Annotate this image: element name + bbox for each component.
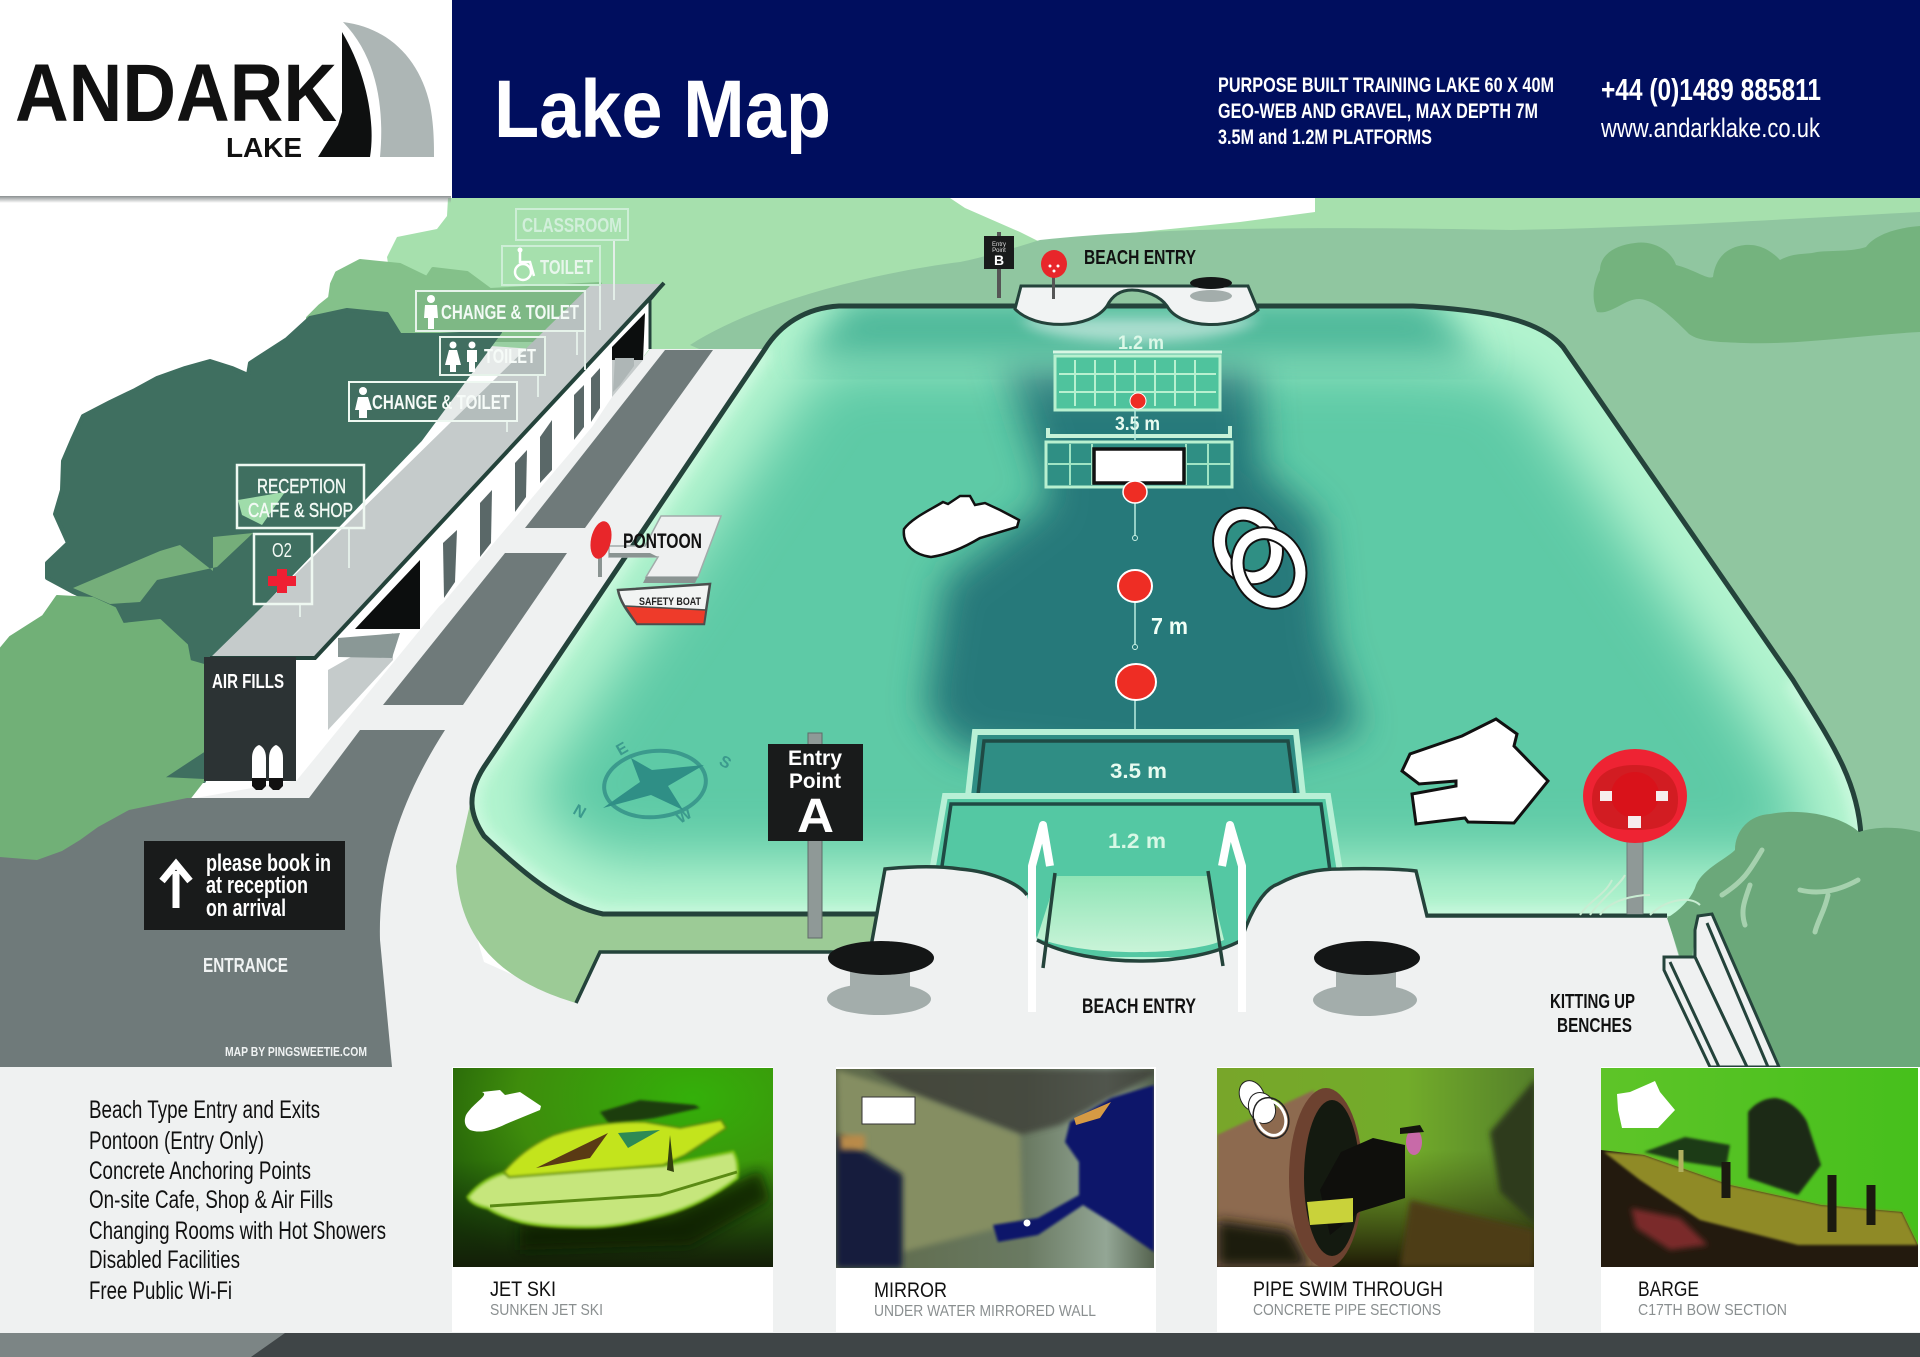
buoy 4	[1116, 664, 1156, 700]
tree bottom right	[1580, 812, 1920, 1067]
entry point B sign: B	[994, 252, 1004, 268]
lake facts	[1218, 74, 1554, 149]
green hill behind the lake	[690, 212, 1920, 1067]
buoy 1	[1130, 393, 1146, 409]
lake outline	[472, 306, 1861, 914]
logo sub word: LAKE	[226, 132, 302, 163]
far beach entry deck	[984, 232, 1258, 325]
sign: women's change and toilet: CHANGE & TOILET	[372, 392, 510, 414]
small light foliage	[73, 533, 253, 604]
near door	[355, 560, 420, 629]
facilities list: On-site Cafe, Shop & Air Fills	[89, 1186, 333, 1214]
lake facts: PURPOSE BUILT TRAINING LAKE 60 X 40M	[1218, 74, 1554, 97]
credit: MAP BY PINGSWEETIE.COM	[225, 1044, 367, 1059]
entry point B sign: Point	[992, 248, 1006, 254]
caption: MIRROR	[874, 1279, 947, 1302]
entrance label: ENTRANCE	[203, 955, 288, 977]
entry point A sign	[768, 733, 863, 938]
photo marker	[1238, 1080, 1264, 1110]
benches label	[1550, 991, 1635, 1037]
depth label: 1.2 m	[1118, 333, 1164, 354]
logo wordmark: ANDARK	[15, 48, 337, 139]
bottom strip	[0, 1067, 1920, 1333]
safety boat: SAFETY BOAT	[639, 596, 701, 608]
wreck hull	[1601, 1150, 1918, 1267]
near platform 3.5 m	[968, 732, 1303, 796]
lower road strip	[383, 553, 567, 705]
caption: CONCRETE PIPE SECTIONS	[1253, 1302, 1441, 1319]
reed plants	[1580, 875, 1700, 915]
caption: SUNKEN JET SKI	[490, 1302, 603, 1319]
arrow up	[162, 864, 190, 908]
jet ski wreck marker	[904, 496, 1019, 557]
red hull patch	[1631, 1208, 1708, 1250]
logo panel	[0, 0, 451, 203]
pipe swim through marker	[1209, 504, 1312, 614]
diver	[1320, 1138, 1405, 1235]
pontoon	[587, 516, 721, 583]
booking notice	[144, 841, 345, 930]
sign: men's change and toilet: CHANGE & TOILET	[441, 302, 579, 324]
distant light green hill	[387, 198, 1920, 360]
sign: classroom: CLASSROOM	[522, 215, 622, 237]
far bollard	[1190, 277, 1232, 302]
air fills block	[204, 657, 296, 790]
booking notice: please book in	[206, 850, 331, 877]
booking notice: on arrival	[206, 895, 286, 922]
near platform 1.2 m	[933, 796, 1340, 960]
sign: women's change and toilet	[349, 382, 517, 421]
card: pipe swim through	[1217, 1067, 1536, 1332]
jet ski hull	[468, 1152, 738, 1227]
entry point A sign: A	[797, 790, 834, 843]
red cross	[268, 569, 296, 593]
title band	[452, 0, 1920, 198]
depth label: 1.2 m	[1108, 830, 1166, 853]
footer bar	[0, 1333, 1920, 1357]
barge frames	[1644, 1137, 1730, 1168]
sign: oxygen and first aid: O2	[272, 540, 292, 562]
logo grey sail	[343, 22, 434, 157]
facilities list: Concrete Anchoring Points	[89, 1157, 311, 1185]
diver	[1748, 1098, 1821, 1195]
compass: N	[570, 802, 589, 822]
buoy 2	[1123, 481, 1147, 503]
facilities list	[89, 1096, 386, 1305]
photo marker	[465, 1090, 541, 1132]
compass: W	[674, 805, 696, 827]
diver	[993, 1085, 1154, 1252]
lake facts: GEO-WEB AND GRAVEL, MAX DEPTH 7M	[1218, 100, 1538, 123]
building signs	[237, 209, 628, 617]
beach entry basin curve	[1037, 871, 1242, 968]
title: Lake Map	[494, 64, 831, 155]
far red marker	[1041, 250, 1067, 299]
light foliage behind reception sign	[238, 492, 285, 525]
kitting up benches	[1664, 914, 1779, 1067]
contact details: +44 (0)1489 885811	[1601, 72, 1821, 107]
roof edge	[210, 283, 664, 658]
sign: classroom	[516, 209, 628, 240]
concrete walkway	[190, 349, 765, 1067]
mirror	[1094, 449, 1184, 483]
caption	[1638, 1278, 1787, 1319]
card: barge	[1601, 1067, 1920, 1332]
upper road strip	[525, 350, 713, 528]
facilities list: Free Public Wi-Fi	[89, 1277, 232, 1305]
sign: reception: RECEPTION	[257, 476, 346, 498]
caption: PIPE SWIM THROUGH	[1253, 1278, 1443, 1301]
bollard left	[827, 941, 934, 1015]
asphalt car park	[0, 730, 445, 1067]
photo: jet ski	[453, 1068, 773, 1267]
handrail right	[1222, 825, 1242, 1012]
building	[204, 283, 664, 790]
pontoon buoy	[587, 519, 615, 577]
caption: BARGE	[1638, 1278, 1699, 1301]
tree canopy behind building	[308, 261, 600, 340]
caption	[490, 1278, 603, 1319]
photo: mirror	[836, 1069, 1154, 1268]
lake outline front edge	[1427, 914, 1667, 918]
sign: accessible toilet	[502, 246, 600, 285]
compass	[570, 739, 734, 827]
beach slope	[1037, 876, 1224, 952]
facilities list: Beach Type Entry and Exits	[89, 1096, 320, 1124]
lake	[472, 296, 1861, 916]
pipe body	[1217, 1090, 1330, 1267]
card: mirror	[836, 1067, 1156, 1332]
roof	[210, 284, 664, 658]
benches label: KITTING UP	[1550, 991, 1635, 1013]
air fills block: AIR FILLS	[212, 671, 284, 693]
sign: reception	[237, 465, 364, 528]
far deep platform with mirror	[1046, 414, 1232, 487]
pontoon label: PONTOON	[623, 530, 702, 553]
logo black sail	[318, 32, 372, 157]
lifebuoy entry marker	[1583, 749, 1687, 938]
jet ski seat	[504, 1120, 726, 1177]
photo: pipe	[1217, 1068, 1536, 1268]
bench by door	[613, 358, 634, 392]
ghost birds in tree	[1722, 850, 1858, 932]
sign: men's change and toilet	[416, 291, 585, 331]
compass: S	[716, 753, 734, 773]
contact details	[1600, 72, 1821, 143]
booking notice: at reception	[206, 872, 308, 899]
caption	[1253, 1278, 1443, 1319]
facilities list: Disabled Facilities	[89, 1246, 240, 1274]
benches label: BENCHES	[1557, 1015, 1632, 1037]
concrete deck near side	[576, 825, 1710, 1067]
sign: accessible toilet: TOILET	[540, 257, 593, 279]
beach entry label: BEACH ENTRY	[1082, 995, 1196, 1018]
barge marker	[1402, 719, 1548, 824]
caption: C17TH BOW SECTION	[1638, 1302, 1787, 1319]
handrail left	[1032, 825, 1050, 1012]
white sky gap	[950, 198, 1315, 242]
compass: E	[614, 739, 632, 759]
caption: JET SKI	[490, 1278, 556, 1301]
gable edge	[650, 283, 664, 349]
photo: barge	[1601, 1068, 1918, 1267]
header	[0, 0, 1920, 203]
sign: toilets	[440, 337, 545, 375]
facilities list: Pontoon (Entry Only)	[89, 1127, 264, 1155]
caption	[874, 1279, 1096, 1320]
water base	[472, 306, 1861, 916]
entry point A sign: Point	[789, 770, 841, 793]
sign: toilets: TOILET	[484, 346, 536, 368]
far beach entry label: BEACH ENTRY	[1084, 247, 1197, 269]
buoy 3	[1118, 570, 1152, 602]
sign: reception: CAFE & SHOP	[248, 500, 353, 522]
caption: UNDER WATER MIRRORED WALL	[874, 1303, 1096, 1320]
photo marker	[1617, 1081, 1675, 1128]
entry point A sign: Entry	[788, 747, 842, 770]
far door	[612, 313, 645, 360]
entry point B sign	[984, 232, 1014, 298]
white wall	[297, 283, 664, 780]
water depth shading	[472, 296, 1861, 916]
wreck deck	[1604, 1152, 1918, 1245]
sign: oxygen and first aid	[254, 534, 312, 604]
air cylinders	[252, 745, 283, 790]
far shallow platform 1.2 m	[1053, 333, 1222, 410]
dark tree canopy	[47, 310, 500, 781]
card: jet ski	[452, 1067, 773, 1332]
contact details: www.andarklake.co.uk	[1600, 113, 1820, 143]
depth line with buoys	[1116, 393, 1188, 735]
grass crescent	[456, 800, 880, 1003]
gable side wall	[612, 360, 643, 397]
facilities list: Changing Rooms with Hot Showers	[89, 1217, 386, 1245]
bollard right	[1313, 941, 1420, 1016]
photo marker	[862, 1097, 915, 1124]
depth label: 3.5 m	[1115, 414, 1160, 435]
map illustration	[0, 198, 1920, 1067]
depth label: 3.5 m	[1110, 760, 1167, 783]
recessed side wall	[328, 633, 393, 730]
sign stems	[300, 240, 614, 617]
recessed step	[338, 633, 400, 658]
tree line top right	[1594, 226, 1920, 343]
entry point B sign: Entry	[992, 242, 1006, 248]
windows	[443, 368, 600, 598]
light green tree bottom left	[0, 596, 204, 862]
safety boat	[618, 584, 710, 624]
lake facts: 3.5M and 1.2M PLATFORMS	[1218, 126, 1432, 149]
depth label 7 m: 7 m	[1151, 613, 1188, 639]
